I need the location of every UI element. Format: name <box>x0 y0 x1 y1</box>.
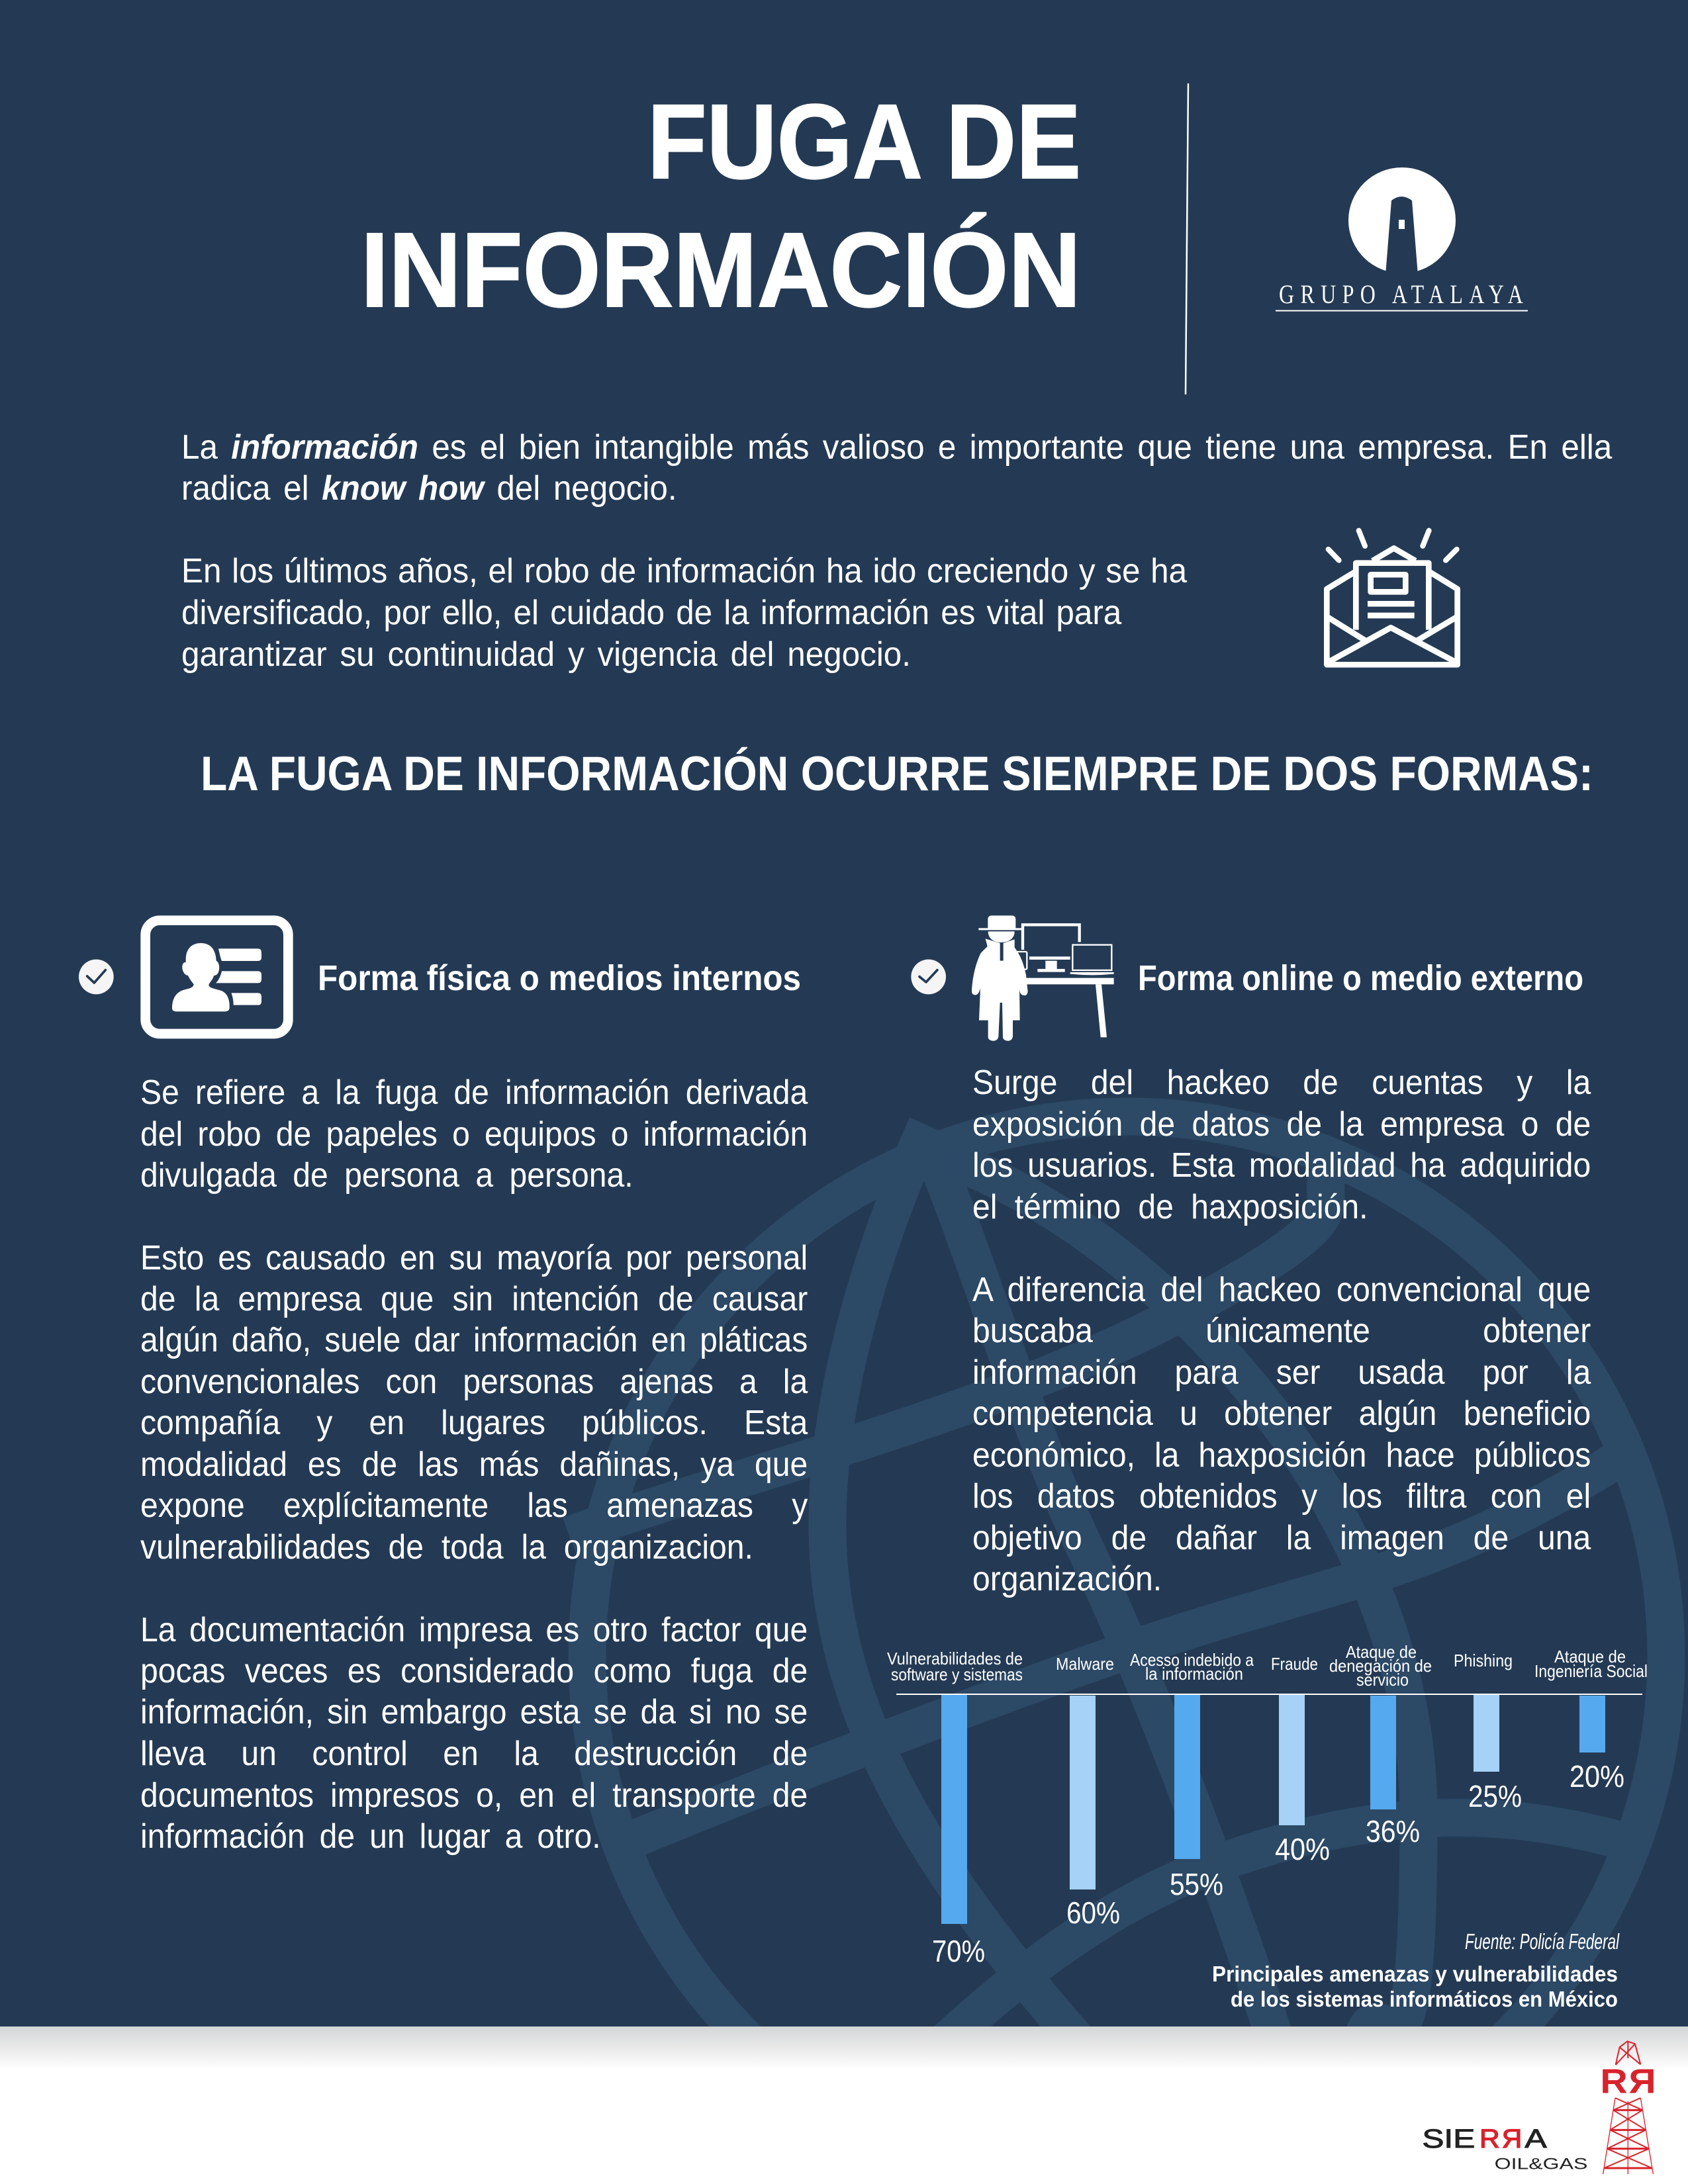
left column: paragraph 2: algún daño, suele dar información en pláticas <box>140 1321 808 1359</box>
left column: paragraph 2: vulnerabilidades de toda la organizacion. <box>140 1528 753 1567</box>
left column: paragraph 2: modalidad es de las más dañinas, ya que <box>140 1445 808 1484</box>
vertical divider <box>1186 83 1188 394</box>
intro text: second paragraph: En los últimos años, el robo de información ha ido creciendo y se ha <box>181 552 1187 590</box>
left column: paragraph 3 <box>140 1611 808 1856</box>
right column: paragraph 2: buscaba únicamente obtener <box>972 1312 1591 1350</box>
intro text: first paragraph: radica el know how del negocio. <box>181 469 677 508</box>
chart caption <box>1212 1962 1618 2011</box>
title: FUGA DE <box>647 82 1081 201</box>
right column: paragraph 2: económico, la haxposición hace públicos <box>972 1436 1591 1475</box>
left column: paragraph 2: Esto es causado en su mayoría por personal <box>140 1239 808 1277</box>
percentage values: 60% <box>1066 1895 1120 1930</box>
heading: forma física: Forma física o medios internos <box>318 958 801 998</box>
left column: paragraph 3: documentos impresos o, en el transporte de <box>140 1776 808 1815</box>
logo: Sierra Oil & Gas: R <box>1479 2124 1500 2154</box>
right column: paragraph 2: los datos obtenidos y los filtra con el <box>972 1477 1591 1516</box>
left column: paragraph 1: divulgada de persona a persona. <box>140 1156 633 1195</box>
logo: Sierra Oil & Gas: OIL&GAS <box>1495 2155 1587 2173</box>
right column: paragraph 2 <box>972 1271 1591 1598</box>
category labels: la información <box>1145 1664 1243 1684</box>
chart axis <box>896 1694 1642 1695</box>
percentage values: 20% <box>1570 1759 1624 1794</box>
logo: Grupo Atalaya: GRUPO ATALAYA <box>1279 280 1523 309</box>
title <box>361 82 1081 329</box>
logo: Sierra Oil & Gas: R <box>1600 2062 1628 2101</box>
category labels <box>887 1642 1648 1690</box>
left column: paragraph 1: del robo de papeles o equipos o información <box>140 1115 808 1154</box>
icon: open envelope with letter <box>1327 531 1458 664</box>
left column: paragraph 2: compañía y en lugares públicos. Esta <box>140 1404 808 1442</box>
right column: paragraph 2: objetivo de dañar la imagen de una <box>972 1519 1591 1557</box>
chart caption: de los sistemas informáticos en México <box>1231 1987 1618 2011</box>
right column: paragraph 1 <box>972 1064 1591 1226</box>
right column: paragraph 1: el término de haxposición. <box>972 1188 1368 1226</box>
right column: paragraph 1: los usuarios. Esta modalidad ha adquirido <box>972 1146 1591 1185</box>
category labels: Fraude <box>1271 1654 1318 1674</box>
bars <box>941 1695 1605 1924</box>
title: INFORMACIÓN <box>361 210 1081 329</box>
logo: Grupo Atalaya <box>1276 167 1528 311</box>
percentage values: 25% <box>1468 1779 1522 1813</box>
category labels: denegación de <box>1329 1656 1432 1676</box>
right column: paragraph 2: A diferencia del hackeo convencional que <box>972 1271 1591 1309</box>
category labels: Ataque de <box>1554 1647 1626 1666</box>
right column: paragraph 1: Surge del hackeo de cuentas y la <box>972 1064 1591 1102</box>
footer shadow <box>0 2026 1688 2070</box>
left column: paragraph 1: Se refiere a la fuga de información derivada <box>140 1073 808 1112</box>
icon: contact card <box>146 921 288 1034</box>
intro text: second paragraph: diversificado, por ello, el cuidado de la información es vital para <box>181 594 1121 632</box>
category labels: servicio <box>1356 1670 1409 1690</box>
chart caption: Principales amenazas y vulnerabilidades <box>1212 1962 1618 1986</box>
left column: paragraph 3: lleva un control en la destrucción de <box>140 1735 808 1773</box>
intro text: second paragraph: garantizar su continuidad y vigencia del negocio. <box>181 635 911 674</box>
category labels: Acesso indebido a <box>1130 1650 1254 1670</box>
category labels: Ingeniería Social <box>1534 1661 1648 1681</box>
icon: hacker at desk <box>972 915 1114 1041</box>
right column: paragraph 2: competencia u obtener algún beneficio <box>972 1394 1591 1433</box>
logo: Sierra Oil & Gas: R <box>1628 2062 1656 2101</box>
icon: check left <box>79 960 114 994</box>
left column: paragraph 3: pocas veces es considerado como fuga de <box>140 1652 808 1690</box>
percentage values: 70% <box>932 1934 985 1968</box>
icon: check right <box>911 960 946 994</box>
left column: paragraph 3: información de un lugar a otro. <box>140 1817 601 1856</box>
left column: paragraph 1 <box>140 1073 808 1195</box>
logo: Sierra Oil & Gas: R <box>1502 2124 1522 2154</box>
logo: Sierra Oil & Gas: A <box>1524 2124 1547 2154</box>
logo: Sierra Oil & Gas <box>1422 2041 1656 2174</box>
category labels: software y sistemas <box>891 1664 1023 1684</box>
left column: paragraph 3: información, sin embargo esta se da si no se <box>140 1693 808 1731</box>
intro text: first paragraph <box>181 428 1613 508</box>
heading: forma online: Forma online o medio externo <box>1138 958 1583 998</box>
chart source: Fuente: Policía Federal <box>1465 1929 1620 1954</box>
category labels: Ataque de <box>1346 1642 1417 1662</box>
intro text: first paragraph: La información es el bien intangible más valioso e importante que tiene una empresa. En ella <box>181 428 1612 467</box>
left column: paragraph 2: convencionales con personas ajenas a la <box>140 1363 808 1401</box>
percentage values <box>932 1759 1624 1968</box>
intro text: second paragraph <box>181 552 1188 674</box>
right column: paragraph 1: exposición de datos de la empresa o de <box>972 1105 1591 1144</box>
right column: paragraph 2: organización. <box>972 1560 1162 1598</box>
right column: paragraph 2: información para ser usada por la <box>972 1353 1591 1392</box>
left column: paragraph 2: de la empresa que sin intención de causar <box>140 1280 808 1318</box>
left column: paragraph 3: La documentación impresa es otro factor que <box>140 1611 808 1649</box>
left column: paragraph 2 <box>140 1239 808 1567</box>
category labels: Malware <box>1056 1654 1114 1674</box>
percentage values: 40% <box>1275 1832 1330 1866</box>
category labels: Vulnerabilidades de <box>887 1649 1023 1668</box>
percentage values: 55% <box>1170 1867 1223 1901</box>
category labels: Phishing <box>1454 1651 1513 1670</box>
logo: Sierra Oil & Gas: SIE <box>1422 2124 1475 2154</box>
left column: paragraph 2: expone explícitamente las amenazas y <box>140 1486 808 1525</box>
percentage values: 36% <box>1366 1814 1420 1848</box>
bar chart <box>887 1642 1648 1968</box>
